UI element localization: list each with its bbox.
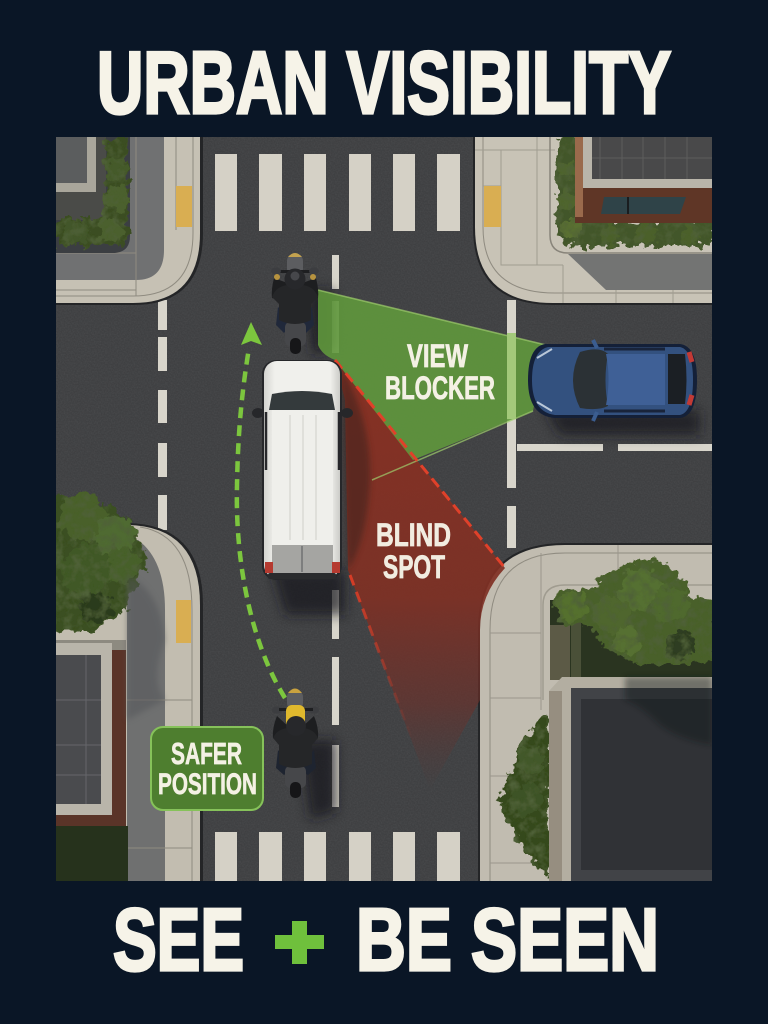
van shadow <box>272 570 345 615</box>
blind spot label: BLIND <box>376 517 451 553</box>
bottom motorcycle shadow <box>300 740 336 820</box>
top crosswalk <box>215 154 460 231</box>
building: south-east <box>549 677 712 881</box>
van shade over blind spot <box>340 365 370 570</box>
sidewalk: south-east corner <box>478 543 712 881</box>
building: north-east <box>575 137 712 223</box>
view blocker label: VIEW <box>407 338 469 374</box>
tree: south-east, lower <box>497 710 550 878</box>
car shadow <box>545 410 700 435</box>
motorcycle and rider: bottom <box>272 688 319 798</box>
tree: south-west <box>50 494 148 632</box>
top motorcycle shadow <box>305 290 334 355</box>
safer position label: SAFER <box>171 736 242 771</box>
safer position label <box>151 727 263 810</box>
blind spot label <box>377 523 450 579</box>
stop line over view zone <box>507 333 516 419</box>
icon: green plus <box>275 921 324 964</box>
sidewalk: north-east corner <box>473 137 712 305</box>
blind spot zone <box>341 368 505 756</box>
building: south-west <box>56 640 126 826</box>
bushes: north-west <box>56 137 129 245</box>
view blocker label: BLOCKER <box>385 370 495 406</box>
lane markings <box>158 255 712 807</box>
view blocker zone <box>318 290 546 460</box>
motorcycle and rider: top <box>271 253 319 354</box>
road surface <box>56 137 712 881</box>
sight line edges <box>318 290 546 480</box>
van <box>252 360 353 580</box>
tagline: BE SEEN <box>356 890 659 989</box>
safer position label: POSITION <box>158 768 257 801</box>
planter with post: south-east <box>550 600 712 680</box>
intersection scene <box>50 137 715 881</box>
sidewalk: north-west corner <box>56 137 203 305</box>
blue car <box>528 340 697 421</box>
tree: south-west canopy shadow <box>127 575 165 720</box>
bushes: north-east <box>556 137 712 246</box>
blind spot dashed edges <box>335 360 505 740</box>
sidewalk: south-west corner <box>56 523 203 881</box>
bottom crosswalk <box>215 832 460 881</box>
tagline: SEE <box>113 890 244 989</box>
tagline <box>113 890 659 989</box>
tree: south-east, upper <box>552 560 715 665</box>
view blocker label <box>386 344 495 400</box>
bushes: south-west <box>56 826 128 881</box>
safer path dashed arrow <box>237 322 285 698</box>
blind spot label: SPOT <box>383 549 445 585</box>
building: north-west <box>56 137 106 220</box>
road grain <box>56 137 712 881</box>
